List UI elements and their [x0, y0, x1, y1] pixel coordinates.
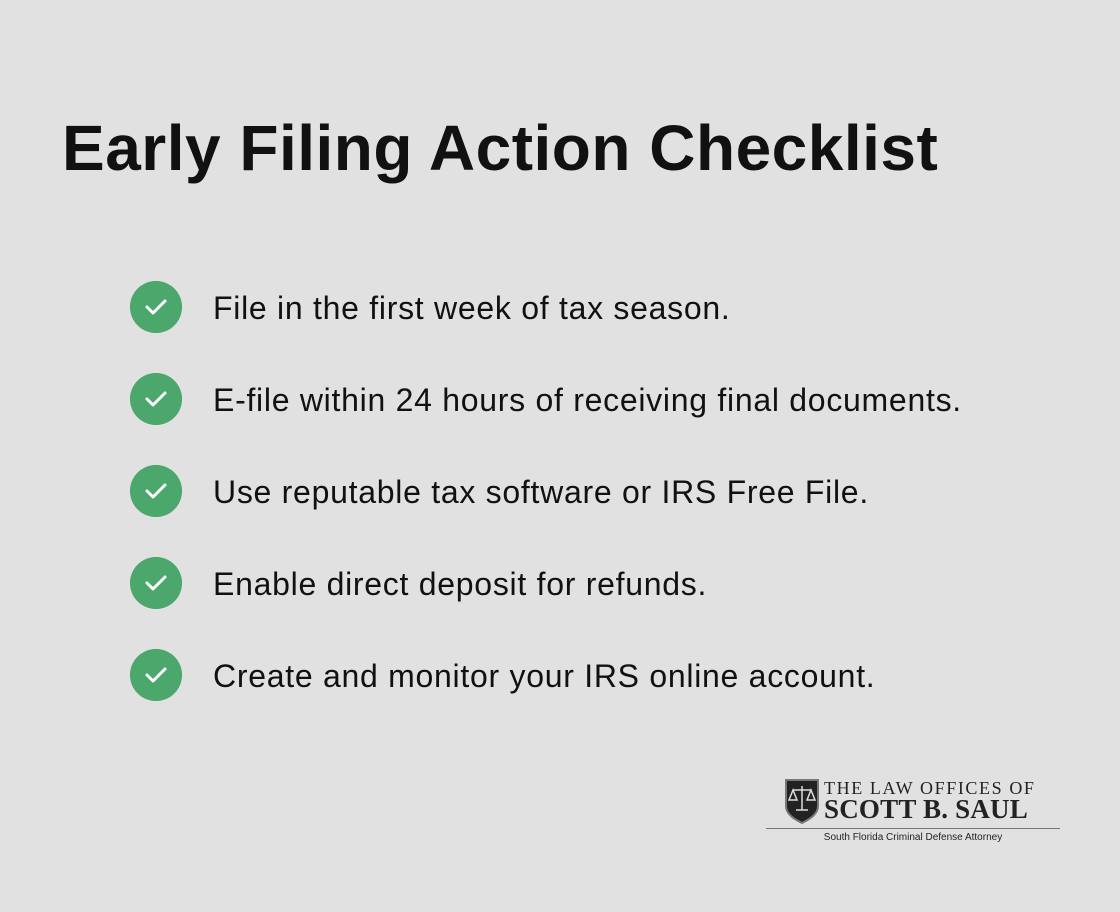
- logo: SCOTT B. SAUL: [824, 794, 1028, 824]
- item 5: [130, 649, 875, 701]
- item 1: File in the first week of tax season.: [213, 290, 731, 326]
- item 2: E-file within 24 hours of receiving final documents.: [213, 382, 962, 418]
- item 3: [130, 465, 869, 517]
- item 4: Enable direct deposit for refunds.: [213, 566, 707, 602]
- logo: [766, 778, 1060, 843]
- checklist: [130, 281, 962, 701]
- item 5: Create and monitor your IRS online account.: [213, 658, 875, 694]
- item 2: [130, 373, 962, 425]
- icon: shield scales: [785, 779, 819, 824]
- logo text: THE LAW OFFICES OF: [824, 778, 1036, 798]
- item 1: [130, 281, 731, 333]
- tagline: South Florida Criminal Defense Attorney: [824, 832, 1002, 843]
- item 4: [130, 557, 707, 609]
- title: Early Filing Action Checklist: [62, 112, 938, 184]
- item 3: Use reputable tax software or IRS Free File.: [213, 474, 869, 510]
